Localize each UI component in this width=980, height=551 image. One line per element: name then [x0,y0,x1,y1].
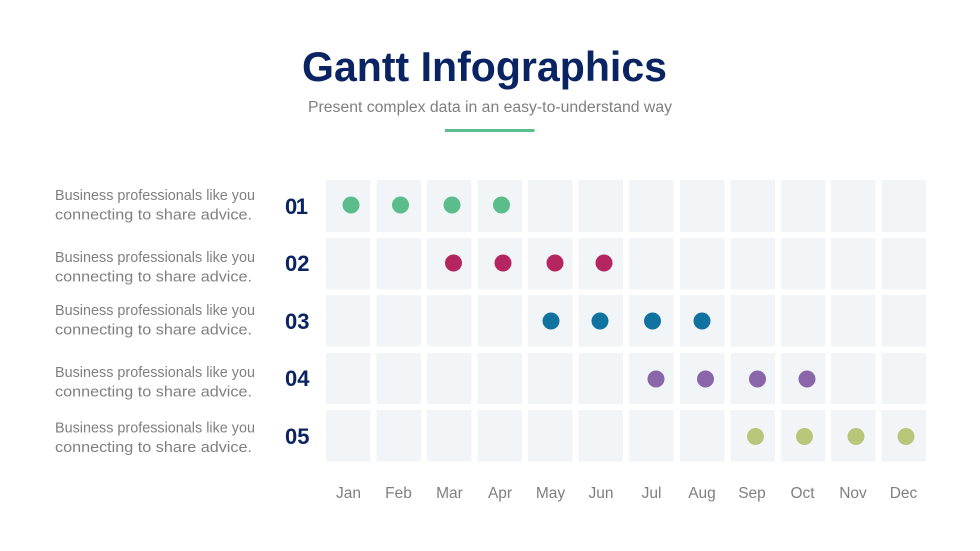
label row 5 [55,420,255,456]
dots: row 3 [542,312,710,330]
row numbers: 05 [285,424,310,449]
subtitle: Present complex data in an easy-to-understand way [308,99,672,116]
label row 1 [55,187,255,224]
dots: row 1 [342,196,510,214]
label row 1: Business professionals like you [55,187,255,204]
month labels: Jun [588,485,614,502]
dots: row 5 [747,428,914,445]
label row 4: connecting to share advice. [55,384,252,400]
month labels: Nov [839,485,867,502]
month labels: Oct [790,485,815,502]
row numbers: 03 [285,309,310,334]
row numbers: 04 [285,366,310,391]
label row 4: Business professionals like you [55,364,255,381]
row numbers: 02 [285,251,310,276]
label row 5: Business professionals like you [55,420,255,436]
label row 3: Business professionals like you [55,302,255,319]
label row 2 [55,249,255,286]
month labels: Jul [642,485,661,502]
title: Gantt Infographics [302,43,667,90]
label row 2: Business professionals like you [55,249,255,266]
dots: row 2 [445,254,612,272]
row labels [55,187,255,456]
label row 3 [55,302,255,338]
label row 2: connecting to share advice. [55,268,252,286]
month labels: Feb [385,485,412,502]
row numbers [285,194,310,449]
month labels: May [536,485,565,502]
row numbers: 01 [285,194,308,219]
month labels: Mar [436,485,463,502]
label row 4 [55,364,255,400]
month labels: Dec [890,485,918,502]
month labels [336,485,918,502]
month labels: Sep [738,485,766,502]
label row 5: connecting to share advice. [55,439,252,456]
month labels: Apr [488,485,512,502]
label row 1: connecting to share advice. [55,206,252,224]
gantt grid [326,180,926,462]
month labels: Aug [688,485,716,502]
dots: row 4 [648,370,816,388]
month labels: Jan [336,485,361,502]
label row 3: connecting to share advice. [55,322,252,338]
title underline [445,129,534,132]
